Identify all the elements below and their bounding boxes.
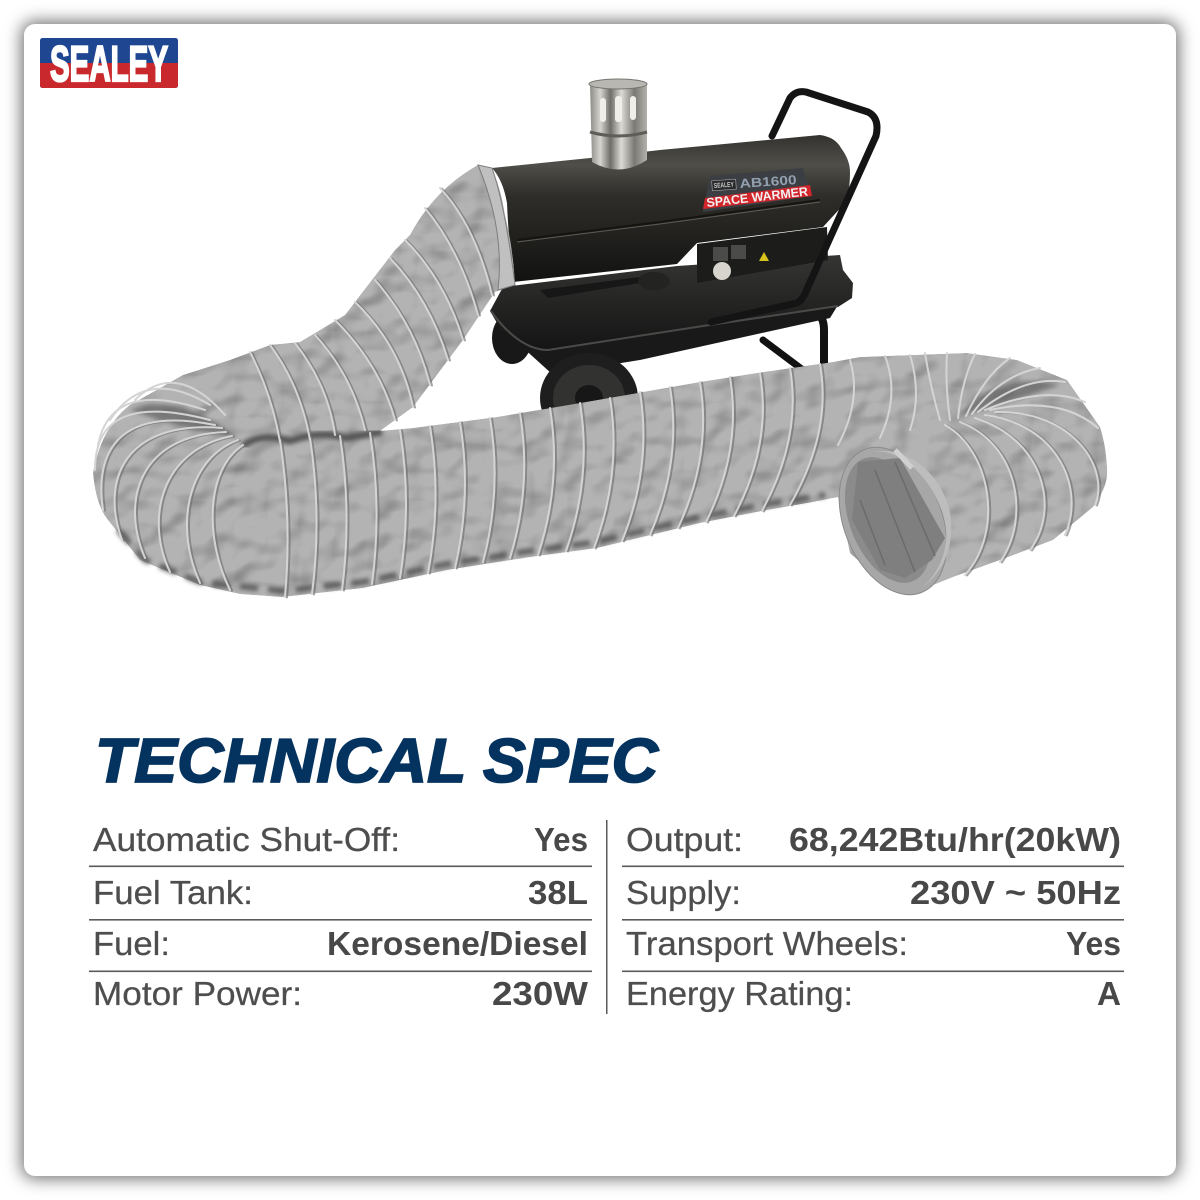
row: transport wheels: Yes <box>1066 925 1121 962</box>
row: automatic shut-off: Automatic Shut-Off: <box>93 821 400 858</box>
row: energy rating: A <box>1097 975 1121 1012</box>
product illustration: space warmer heater <box>490 79 877 443</box>
row: automatic shut-off <box>93 821 588 858</box>
transport handle <box>711 92 877 322</box>
row: fuel tank: 38L <box>528 874 588 911</box>
control panel <box>697 227 828 283</box>
heater barrel <box>492 135 850 282</box>
row: output: Output: <box>626 821 743 858</box>
row: fuel tank <box>93 874 588 911</box>
flue chimney <box>589 79 647 170</box>
fuel cap <box>638 272 670 290</box>
label plate: AB1600 space warmer: SEALEY <box>714 182 734 190</box>
row: transport wheels <box>626 925 1121 962</box>
under tray <box>520 305 838 374</box>
heading: technical spec: TECHNICAL SPEC <box>95 727 659 796</box>
legs and frame <box>622 312 824 370</box>
row: energy rating <box>626 975 1121 1012</box>
dark pleat folds at left bend <box>130 404 238 438</box>
product illustration: grey flexible ducting hose <box>93 165 1107 611</box>
row: supply: Supply: <box>626 874 741 911</box>
row: fuel tank: Fuel Tank: <box>93 874 253 911</box>
row: motor power: Motor Power: <box>93 975 302 1012</box>
row: supply <box>626 874 1121 911</box>
rear wheel <box>492 312 532 364</box>
row: output <box>626 821 1121 858</box>
row: fuel: Fuel: <box>93 925 170 962</box>
panel: left specification table <box>93 821 589 1012</box>
label plate: AB1600 space warmer: AB1600 <box>739 172 797 191</box>
pleat shadow along underside <box>118 495 825 591</box>
logo: Sealey: SEALEY <box>50 36 168 92</box>
row: automatic shut-off: Yes <box>534 821 588 858</box>
row: output: 68,242Btu/hr(20kW) <box>789 821 1121 858</box>
wire rib shadows <box>103 188 1100 598</box>
panel: right specification table <box>626 821 1121 1012</box>
label plate: AB1600 space warmer <box>703 168 812 212</box>
row: motor power <box>93 975 589 1012</box>
wire ribs <box>95 188 1098 597</box>
dark pleat folds at right bend <box>958 381 1060 416</box>
open end cuff of hose <box>819 431 967 611</box>
row: fuel: Kerosene/Diesel <box>327 925 588 962</box>
front wheel <box>540 353 638 443</box>
overlap shadow between tubes <box>243 432 382 446</box>
logo: Sealey <box>40 36 178 92</box>
row: transport wheels: Transport Wheels: <box>626 925 908 962</box>
row: supply: 230V ~ 50Hz <box>910 874 1121 911</box>
row: motor power: 230W <box>492 975 589 1012</box>
row: energy rating: Energy Rating: <box>626 975 853 1012</box>
fuel tank base <box>490 255 853 351</box>
row: fuel <box>93 925 588 962</box>
hose body <box>93 165 1107 597</box>
hose collar at heater <box>478 165 515 290</box>
label plate: AB1600 space warmer: SPACE WARMER <box>706 185 809 210</box>
